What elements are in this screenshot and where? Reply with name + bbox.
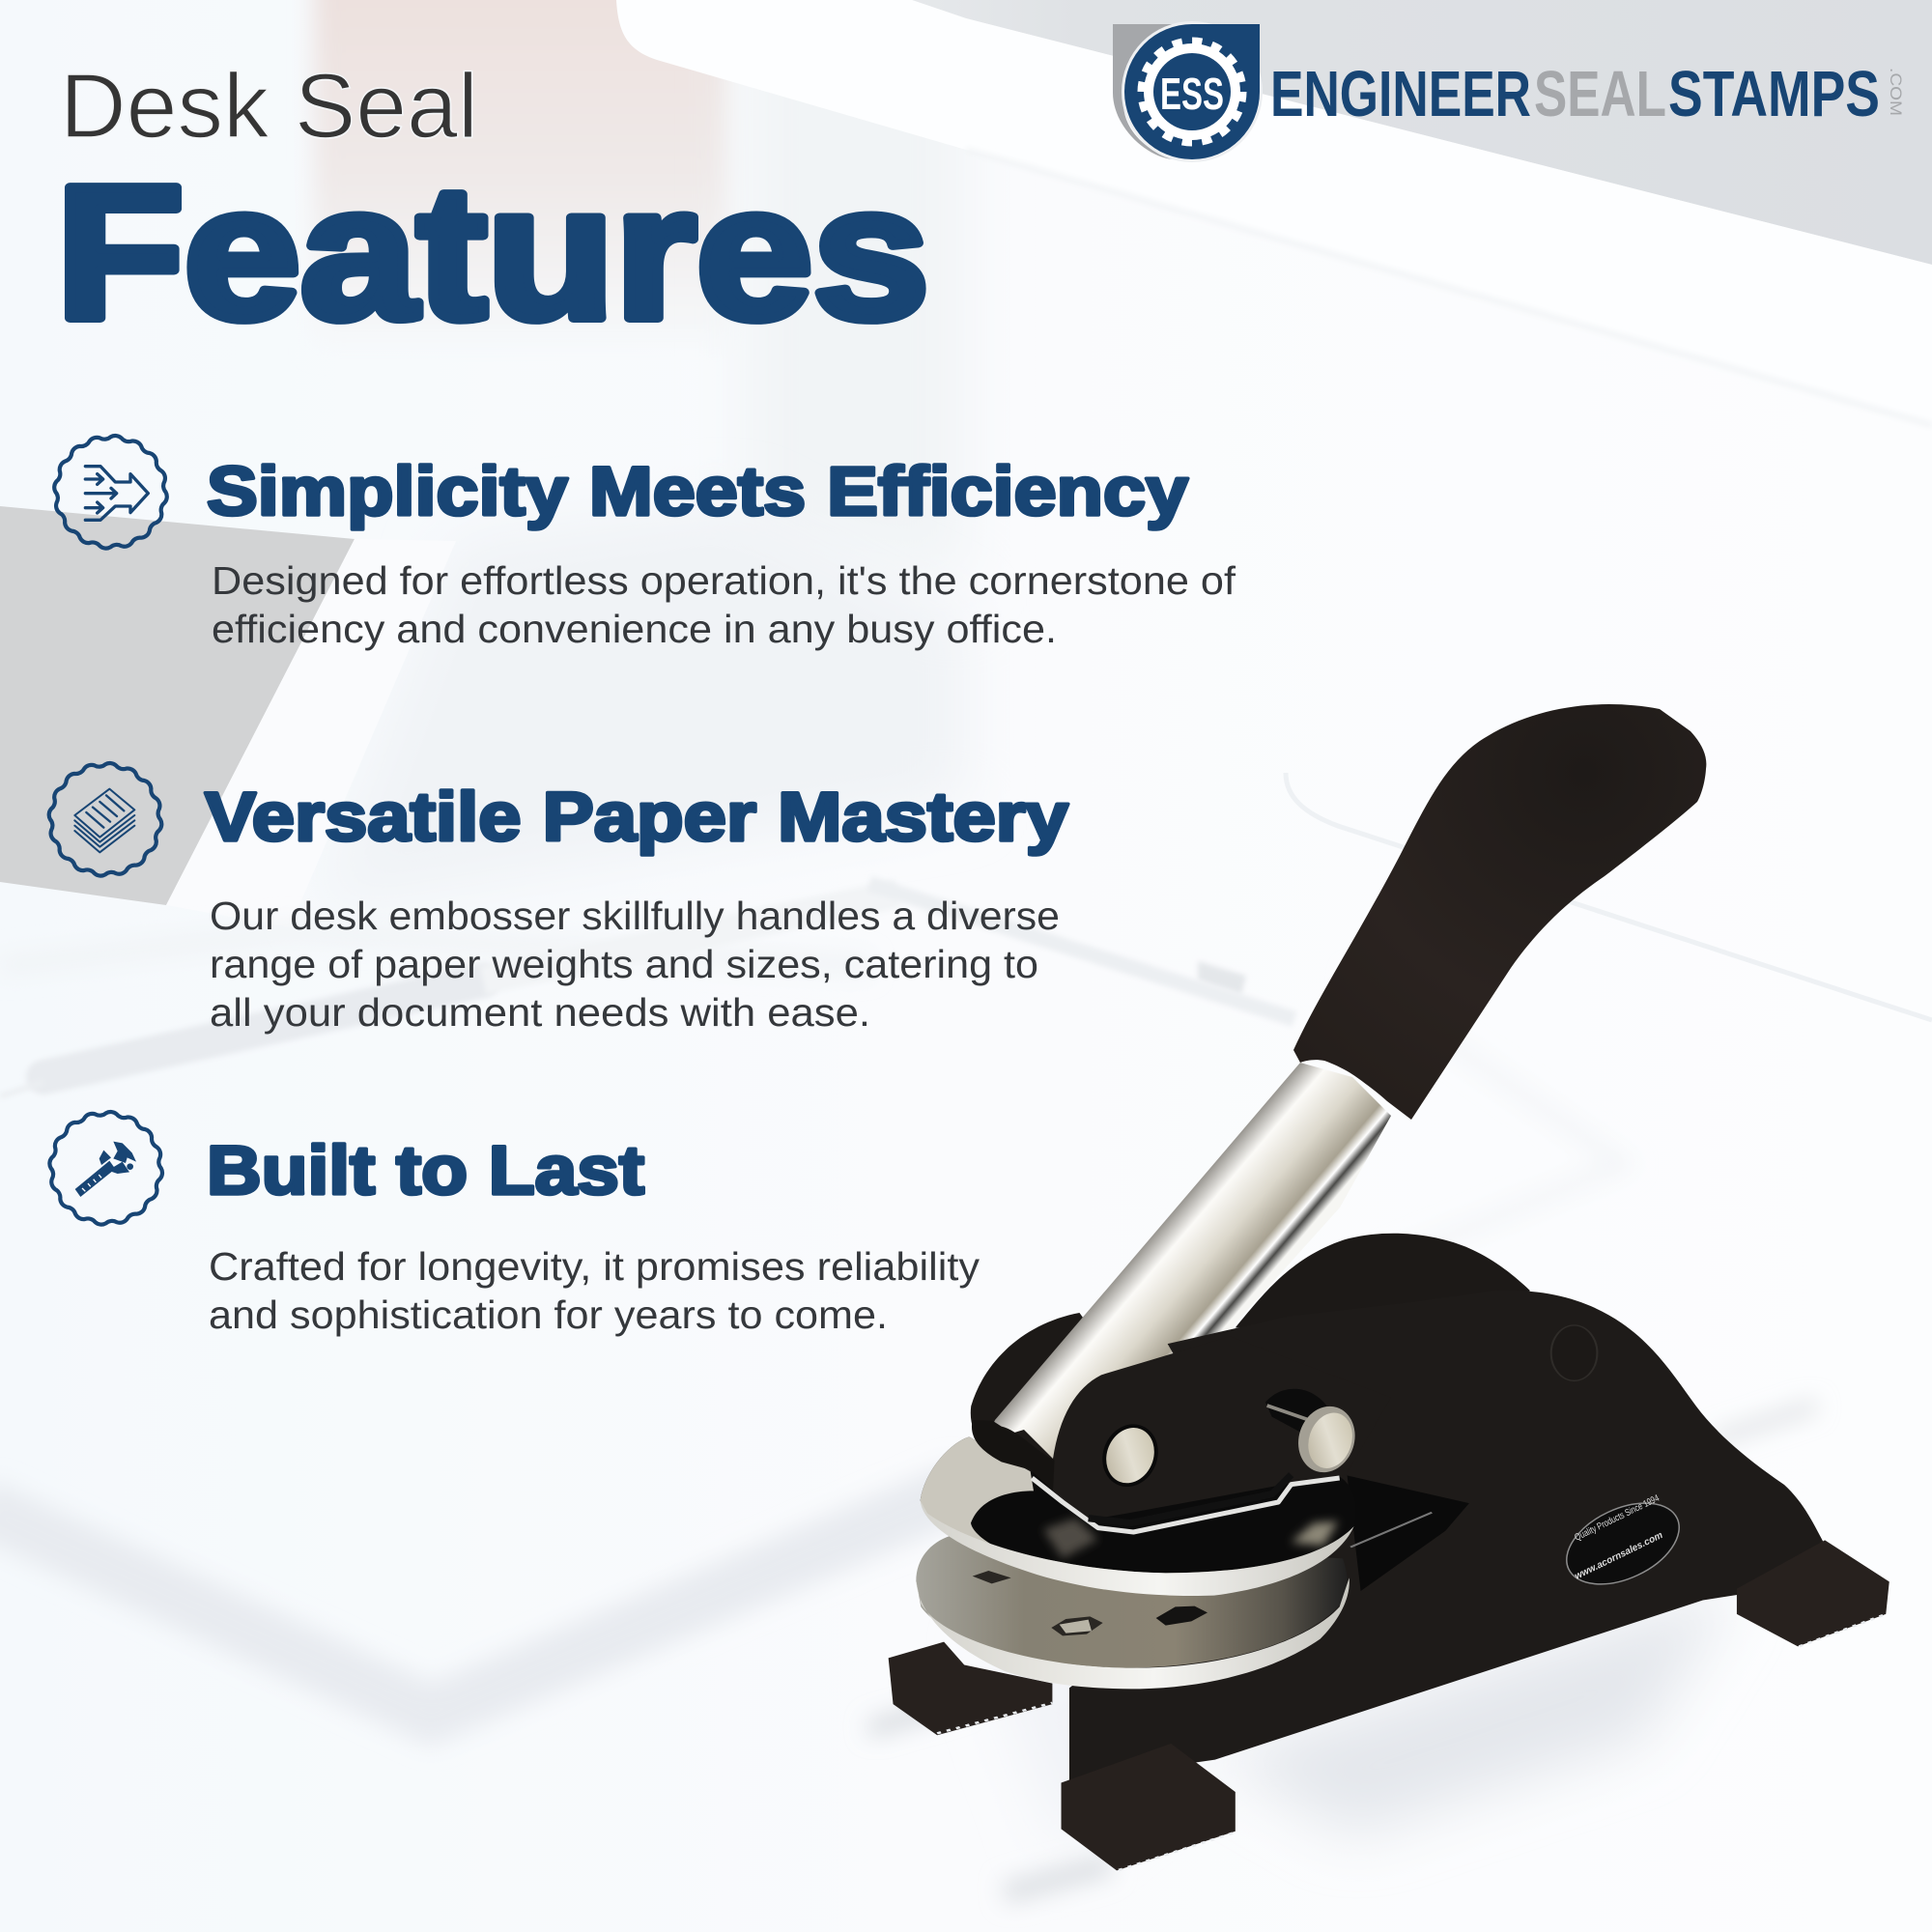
body text [210,894,1060,1035]
title line: Features: Features [56,147,929,358]
body text: Crafted for longevity, it promises reliability [209,1244,980,1289]
body text: range of paper weights and sizes, catering to [210,942,1038,986]
product: desk embosser [869,704,1889,1893]
body text [209,1244,980,1337]
title line: Desk Seal: Desk Seal [60,55,478,157]
body text: and sophistication for years to come. [209,1293,888,1337]
upper disc [921,1436,1356,1596]
logo wordmark: ENGINEER [1270,58,1531,130]
icon: paper stack [49,763,161,876]
body text: Our desk embosser skillfully handles a diverse [210,894,1060,938]
round plug [1551,1325,1597,1380]
heading: Built to Last [207,1133,644,1209]
heading: Simplicity Meets Efficiency [207,454,1189,530]
slot hole and right pin [1265,1389,1363,1480]
body text: efficiency and convenience in any busy office. [212,607,1057,651]
logo shield [1113,21,1263,162]
icon: merging arrows [54,436,167,549]
handle grip [1293,704,1706,1120]
chrome lever shaft [985,1063,1391,1459]
cam lower edge over the disc [972,1420,1055,1491]
embosser shadows [869,1406,1816,1893]
body text: all your document needs with ease. [210,990,870,1035]
heading: Versatile Paper Mastery [205,780,1069,856]
body text: Designed for effortless operation, it's the cornerstone of [212,558,1236,603]
badge: Acorn Sales oval [1554,1487,1691,1601]
notch [1348,1475,1469,1591]
spring [1350,1513,1432,1548]
die strip [1032,1478,1340,1532]
feature 1: Simplicity Meets Efficiency [54,436,1236,651]
right foot [1737,1540,1889,1646]
icon: caliper [49,1112,162,1225]
front foot [1062,1744,1236,1870]
feature 2: Versatile Paper Mastery [49,763,1069,1035]
badge: Acorn Sales oval: www.acornsales.com [1573,1530,1664,1582]
logo shield: ESS [1160,69,1224,119]
back plate and cam [971,1234,1530,1494]
logo wordmark: SEAL [1534,58,1666,130]
logo: Engineer Seal Stamps [1113,21,1905,162]
body text [212,558,1236,651]
black lever head [1031,1336,1391,1520]
embossing discs and lever head [916,1336,1391,1689]
lower disc [916,1536,1350,1689]
main body plate [1069,1291,1825,1780]
left pin [1094,1416,1167,1495]
left foot [889,1642,1052,1735]
logo wordmark [1270,58,1905,130]
badge: Acorn Sales oval: Quality Products Since 1994 [1573,1493,1662,1544]
logo wordmark: .COM [1887,68,1905,116]
logo wordmark: STAMPS [1668,58,1880,130]
feet [889,1540,1889,1870]
feature 3: Built to Last [49,1112,980,1337]
